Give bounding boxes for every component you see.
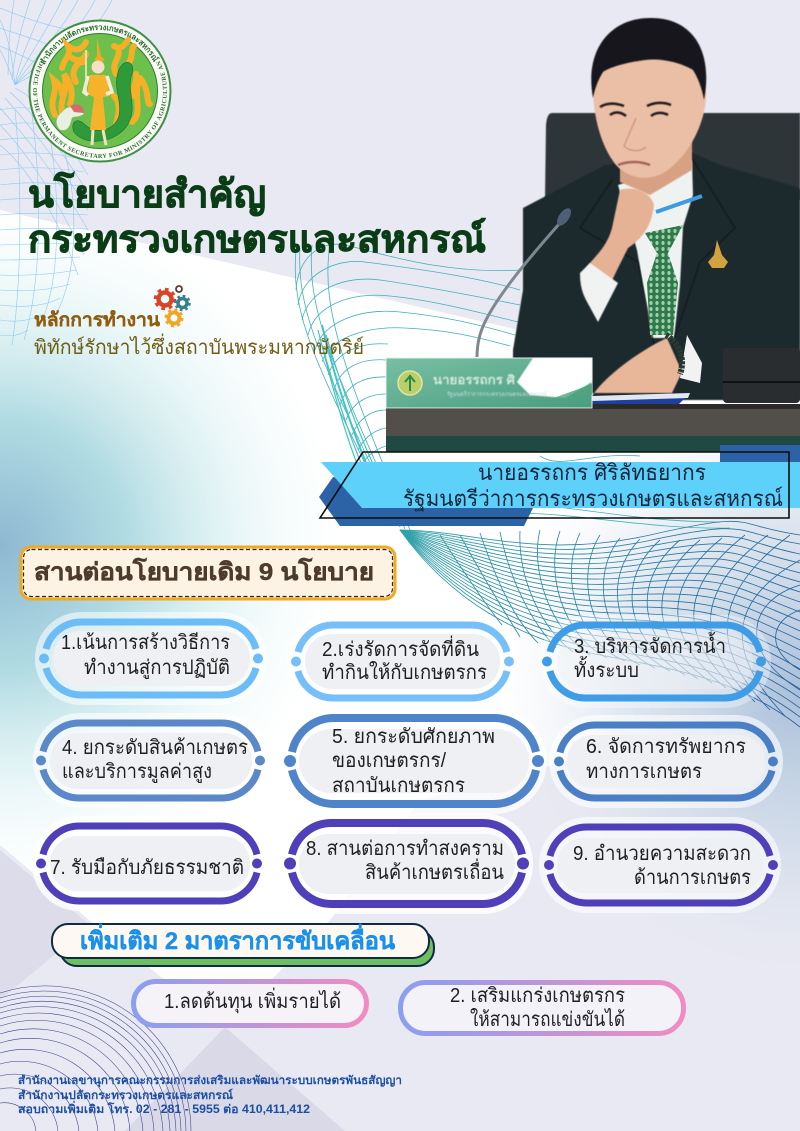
microphone [477, 214, 568, 357]
policy pill 8: สินค้าเกษตรเถื่อน [365, 858, 504, 884]
paper on desk [592, 393, 690, 405]
measure pill 2 [400, 982, 684, 1034]
heading: 2 additional measures [52, 923, 434, 966]
nameplate: รัฐมนตรีว่าการกระทรวงเกษตรและสหกรณ์ [447, 390, 547, 398]
policy pill 1: 1.เน้นการสร้างวิธีการ [61, 632, 230, 654]
icon: gears [156, 286, 190, 326]
neck and face [620, 130, 692, 195]
policy pill 9: ด้านการเกษตร [634, 867, 751, 889]
policy pill 6 [549, 715, 783, 808]
eyes, brows, nose and mouth [600, 103, 671, 165]
mesh: central teal funnel lines [295, 244, 730, 530]
lapels [580, 160, 735, 350]
footer credits: สำนักงานเลขานุการคณะกรรมการส่งเสริมและพัฒนาระบบเกษตรพันธสัญญา [18, 1073, 402, 1088]
policy pill 5: สถาบันเกษตรกร [332, 775, 465, 797]
logo ring text: สำนักงานปลัดกระทรวงเกษตรและสหกรณ์ [40, 25, 160, 64]
hair [591, 18, 706, 100]
policy pill 2: ทำกินให้กับเกษตรกร [322, 661, 487, 684]
lapel pin [708, 240, 728, 268]
working principle text: พิทักษ์รักษาไว้ซึ่งสถาบันพระมหากษัตริย์ [34, 333, 364, 359]
heading: 2 additional measures: เพิ่มเติม 2 มาตราการขับเคลื่อน [80, 923, 396, 955]
photo: minister at desk [386, 18, 800, 452]
policy pill 4: และบริการมูลค่าสูง [62, 761, 212, 784]
minister role: รัฐมนตรีว่าการกระทรวงเกษตรและสหกรณ์ [403, 486, 783, 512]
policy pill 2: 2.เร่งรัดการจัดที่ดิน [322, 635, 479, 661]
cuff, lower hand and bracelet [680, 335, 702, 383]
policy pill 8: 8. สานต่อการทำสงคราม [306, 838, 504, 860]
mesh: lower right blue-teal net [400, 521, 800, 727]
policy pill 7 [32, 816, 268, 911]
folder [723, 348, 800, 403]
title [28, 171, 486, 261]
policy pill 1 [35, 612, 267, 705]
measure pill 2: ให้สามารถแข่งขันได้ [470, 1008, 625, 1031]
policy pill 9 [539, 817, 781, 913]
measure pill 2: 2. เสริมแกร่งเกษตรกร [450, 985, 625, 1007]
nameplate: นายอรรถกร ศิ [433, 373, 515, 387]
footer credits [18, 1073, 402, 1116]
nameplate [386, 358, 592, 408]
footer credits: สอบถามเพิ่มเติม โทร. 02 - 281 - 5955 ต่อ 410,411,412 [18, 1100, 310, 1116]
pen [656, 196, 702, 212]
policy pill 6: ทางการเกษตร [586, 761, 702, 783]
arm and hand near chin [585, 189, 654, 285]
mesh: bottom-left purple concentric arcs [0, 986, 191, 1131]
suit [513, 153, 800, 400]
policy pill 5: 5. ยกระดับศักยภาพ [332, 726, 495, 748]
policy pill 3: 3. บริหารจัดการน้ำ [574, 632, 726, 658]
policy pill 4 [33, 713, 268, 808]
heading: continue 9 policies [21, 547, 395, 599]
policy pill 9: 9. อำนวยความสะดวก [573, 843, 751, 865]
policy pill 6: 6. จัดการทรัพยากร [586, 736, 746, 758]
tie [645, 225, 683, 335]
policy pill 2 [287, 615, 518, 708]
policy pill 8 [281, 813, 533, 914]
policy pill 4: 4. ยกระดับสินค้าเกษตร [62, 737, 248, 759]
footer credits: สำนักงานปลัดกระทรวงเกษตรและสหกรณ์ [18, 1088, 233, 1102]
logo: Office of the Permanent Secretary seal [28, 20, 172, 162]
name banner [319, 445, 800, 526]
chair [545, 113, 800, 200]
title: กระทรวงเกษตรและสหกรณ์ [28, 218, 486, 261]
shirt [618, 160, 693, 338]
policy pill 5: ของเกษตรกร/ [332, 750, 446, 772]
heading: continue 9 policies: สานต่อนโยบายเดิม 9 นโยบาย [34, 557, 374, 586]
mesh: top-left blue lines [0, 0, 112, 345]
policy pill 7: 7. รับมือกับภัยธรรมชาติ [50, 857, 244, 879]
minister name: นายอรรถกร ศิริลัทธยากร [478, 460, 706, 485]
measure pill 1 [134, 982, 366, 1026]
policy pill 3 [539, 615, 771, 708]
working principle heading: หลักการทำงาน [34, 310, 160, 331]
logo inner emblem [42, 34, 158, 148]
desk [386, 404, 800, 409]
measure pill 1: 1.ลดต้นทุน เพิ่มรายได้ [164, 987, 341, 1014]
policy pill 5 [281, 708, 547, 814]
policy pill 3: ทั้งระบบ [574, 656, 639, 682]
title: นโยบายสำคัญ [28, 171, 266, 216]
policy pill 1: ทำงานสู่การปฏิบัติ [84, 657, 230, 680]
